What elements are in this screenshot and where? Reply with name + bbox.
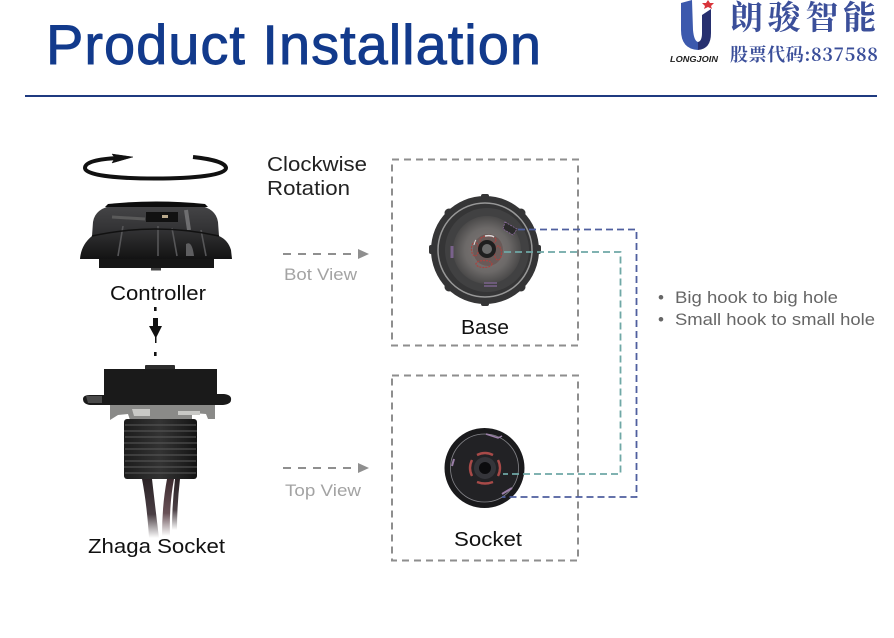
connector: big hook to big hole [502,230,636,497]
arrow: top view [283,463,369,473]
label: Zhaga Socket: Zhaga Socket [88,535,225,558]
wires [142,479,180,538]
arrow: controller down to socket [149,307,162,356]
label: Socket: Socket [454,529,522,551]
notes: hook instructions: Big hook to big hole [675,288,838,307]
logo mark [681,0,714,50]
panel: socket [392,376,578,560]
arrow: bot view [283,249,369,259]
logo: Longjoin [670,0,878,67]
notes: hook instructions [658,288,875,329]
label: Bot View: Bot View [284,265,358,284]
label: Controller: Controller [110,283,206,305]
panel: base [392,160,578,346]
logo wordmark: LONGJOIN [670,54,719,64]
label: Base: Base [461,317,509,339]
stock code: 股票代码:837588 [730,41,878,67]
connector: small hook to small hole [503,252,620,474]
label: Clockwise Rotation [267,153,367,200]
image: Zhaga socket [83,365,231,538]
notes: hook instructions: • [658,288,664,307]
icon: rotation arrow [85,154,226,178]
label: Clockwise Rotation: Rotation [267,177,350,200]
label: Top View: Top View [285,481,362,500]
title: Product Installation [46,13,541,76]
image: socket top view [444,428,524,508]
image: controller [80,202,232,270]
notes: hook instructions: Small hook to small hole [675,310,875,329]
label: Clockwise Rotation: Clockwise [267,153,367,176]
header divider [25,95,877,97]
notes: hook instructions: • [658,310,664,329]
image: base bottom view [429,194,541,306]
